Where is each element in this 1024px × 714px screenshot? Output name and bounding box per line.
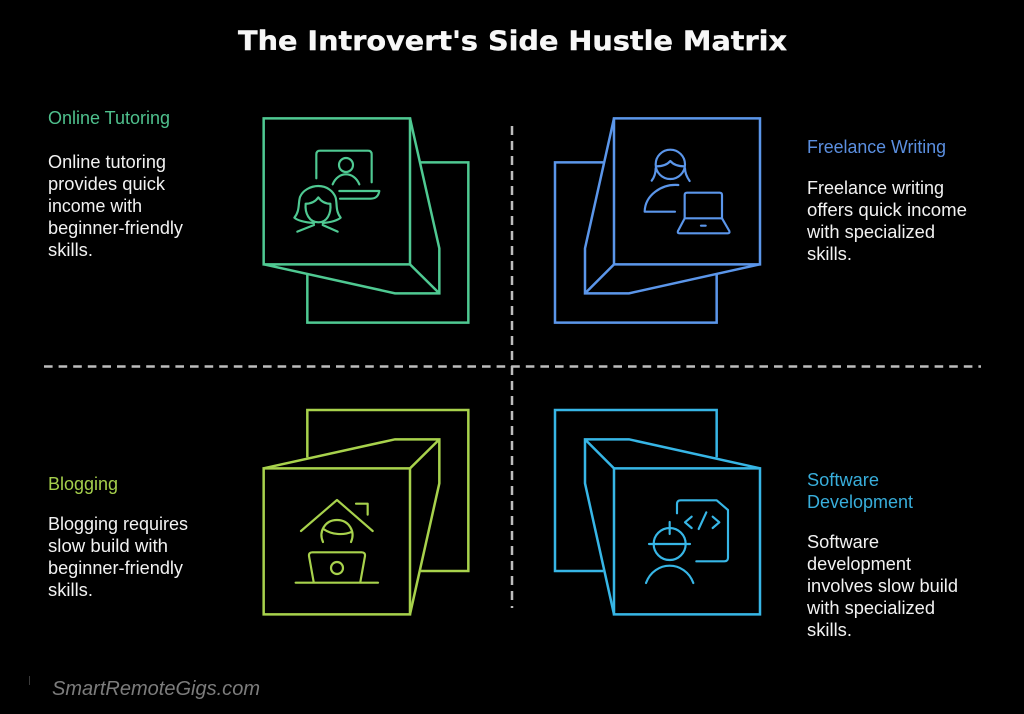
freelance writing text: [806, 137, 967, 264]
icon: home blogger: [296, 500, 378, 583]
online tutoring text: beginner-friendly: [48, 218, 183, 238]
software development text: [806, 470, 958, 640]
software development text: Software: [807, 532, 879, 552]
blogging text: Blogging requires: [48, 514, 188, 534]
blogging text: slow build with: [48, 536, 168, 556]
title: The Introvert's Side Hustle Matrix: [238, 26, 787, 57]
freelance writing text: Freelance writing: [807, 178, 944, 198]
online tutoring frame and icon: [264, 118, 468, 323]
online tutoring text: provides quick: [48, 174, 166, 194]
freelance writing text: Freelance Writing: [807, 137, 946, 157]
matrix axes: [44, 126, 981, 608]
software development text: involves slow build: [807, 576, 958, 596]
blogging text: beginner-friendly: [48, 558, 183, 578]
online tutoring text: [48, 108, 183, 260]
blogging text: skills.: [48, 580, 93, 600]
panel: online tutoring: [48, 108, 468, 323]
online tutoring text: skills.: [48, 240, 93, 260]
panel: freelance writing: [555, 118, 967, 323]
software development text: skills.: [807, 620, 852, 640]
software development text: with specialized: [806, 598, 935, 618]
icon: writer with laptop: [645, 150, 729, 233]
freelance writing frame and icon: [555, 118, 760, 323]
blogging text: Blogging: [48, 474, 118, 494]
software development text: Software: [807, 470, 879, 490]
online tutoring text: Online tutoring: [48, 152, 166, 172]
panel: blogging: [48, 410, 468, 614]
freelance writing text: with specialized: [806, 222, 935, 242]
software development frame and icon: [555, 410, 760, 614]
panel: software development: [555, 410, 958, 640]
online tutoring text: income with: [48, 196, 142, 216]
software development text: development: [807, 554, 911, 574]
software development text: Development: [807, 492, 913, 512]
blogging frame and icon: [264, 410, 468, 614]
icon: developer with code file: [646, 500, 728, 583]
online tutoring text: Online Tutoring: [48, 108, 170, 128]
freelance writing text: offers quick income: [807, 200, 967, 220]
watermark: SmartRemoteGigs.com: [52, 677, 260, 700]
blogging text: [48, 474, 188, 600]
freelance writing text: skills.: [807, 244, 852, 264]
icon: tutor with laptop: [294, 151, 379, 232]
